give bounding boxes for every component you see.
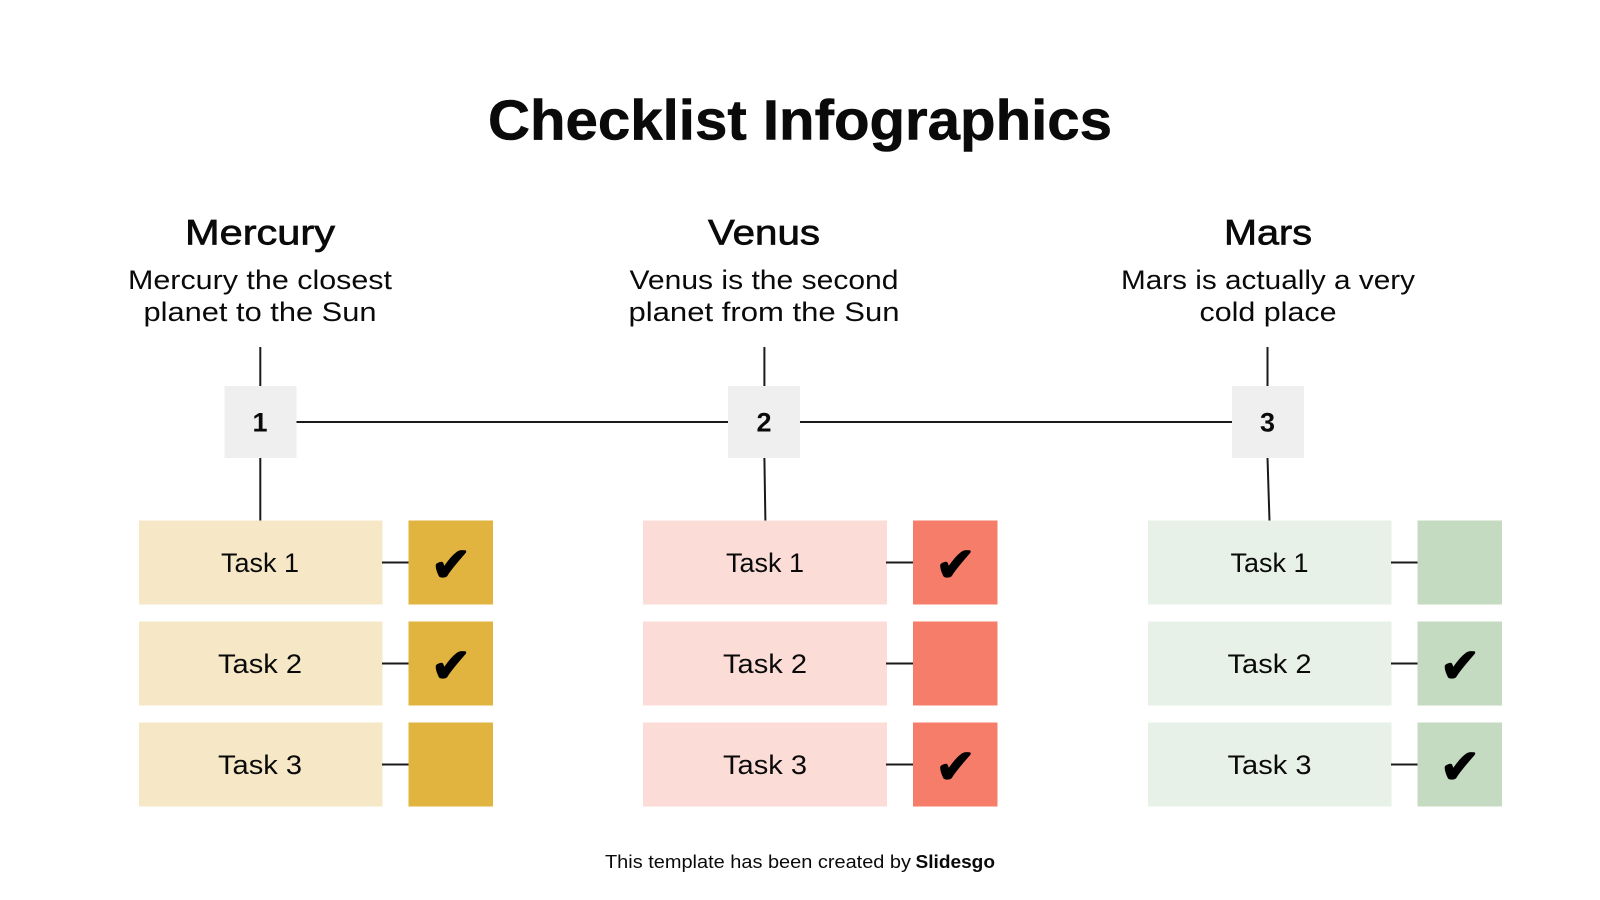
description: Mercury (128, 265, 393, 327)
panel: Mercury (128, 214, 493, 806)
task row: Venus task 2, unchecked: Task 2 (723, 649, 807, 679)
task row: Mars task 2, checked (1148, 622, 1502, 706)
task row: Mars task 3, checked: Task 3 (1228, 750, 1312, 780)
task row: Mercury task 1, checked: ✔ (431, 537, 471, 593)
task row: Mars task 2, checked: ✔ (1440, 638, 1480, 694)
task row: Mars task 1, unchecked: Task 1 (1230, 548, 1308, 578)
number badge 2: 2 (756, 408, 772, 438)
task row: Venus task 1, checked: Task 1 (726, 548, 804, 578)
number badge 2 (728, 386, 800, 458)
number badge 1 (224, 386, 296, 458)
description: Venus: planet from the Sun (628, 297, 900, 327)
task row: Mercury task 3, unchecked: Task 3 (218, 750, 302, 780)
footer credit: Slidesgo (916, 851, 995, 872)
task row: Mars task 2, checked: Task 2 (1228, 649, 1312, 679)
number badge 1: 1 (252, 408, 268, 438)
footer credit: This template has been created by (605, 851, 912, 872)
task row: Mercury task 2, checked: Task 2 (218, 649, 302, 679)
connector: Venus vertical (764, 347, 765, 521)
task row: Mars task 3, checked: ✔ (1440, 739, 1480, 795)
description: Mars: Mars is actually a very (1121, 265, 1416, 295)
connector: Mercury vertical (259, 347, 261, 521)
heading: Venus: Venus (708, 214, 820, 252)
heading: Mercury: Mercury (185, 214, 336, 252)
task row: Mercury task 2, checked: ✔ (431, 638, 471, 694)
task row: Venus task 3, checked: Task 3 (723, 750, 807, 780)
panel: Venus (628, 214, 998, 806)
number badge 3: 3 (1260, 408, 1275, 438)
task row: Venus task 1, checked: ✔ (935, 537, 976, 593)
description: Mercury: planet to the Sun (144, 297, 376, 327)
number badge 3 (1232, 386, 1304, 458)
task row: Mars task 3, checked (1148, 722, 1502, 806)
description: Venus (628, 265, 900, 327)
connector: Mars vertical (1268, 347, 1270, 521)
description: Mars (1121, 265, 1416, 327)
task row: Mercury task 3, unchecked (139, 722, 493, 806)
horizontal timeline connector (296, 421, 1232, 423)
panel: Mars (1121, 214, 1502, 806)
task row: Venus task 3, checked: ✔ (935, 739, 976, 795)
title: Checklist Infographics (488, 88, 1112, 152)
description: Venus: Venus is the second (630, 265, 898, 295)
task row: Mars task 1, unchecked (1148, 520, 1502, 604)
task row: Venus task 1, checked (643, 520, 998, 604)
task row: Mercury task 2, checked (139, 622, 493, 706)
description: Mercury: Mercury the closest (128, 265, 393, 295)
heading: Mars: Mars (1224, 214, 1312, 252)
task row: Mercury task 1, checked (139, 520, 493, 604)
task row: Mercury task 1, checked: Task 1 (221, 548, 299, 578)
task row: Venus task 3, checked (643, 722, 998, 806)
task row: Venus task 2, unchecked (643, 622, 998, 706)
description: Mars: cold place (1200, 297, 1336, 327)
